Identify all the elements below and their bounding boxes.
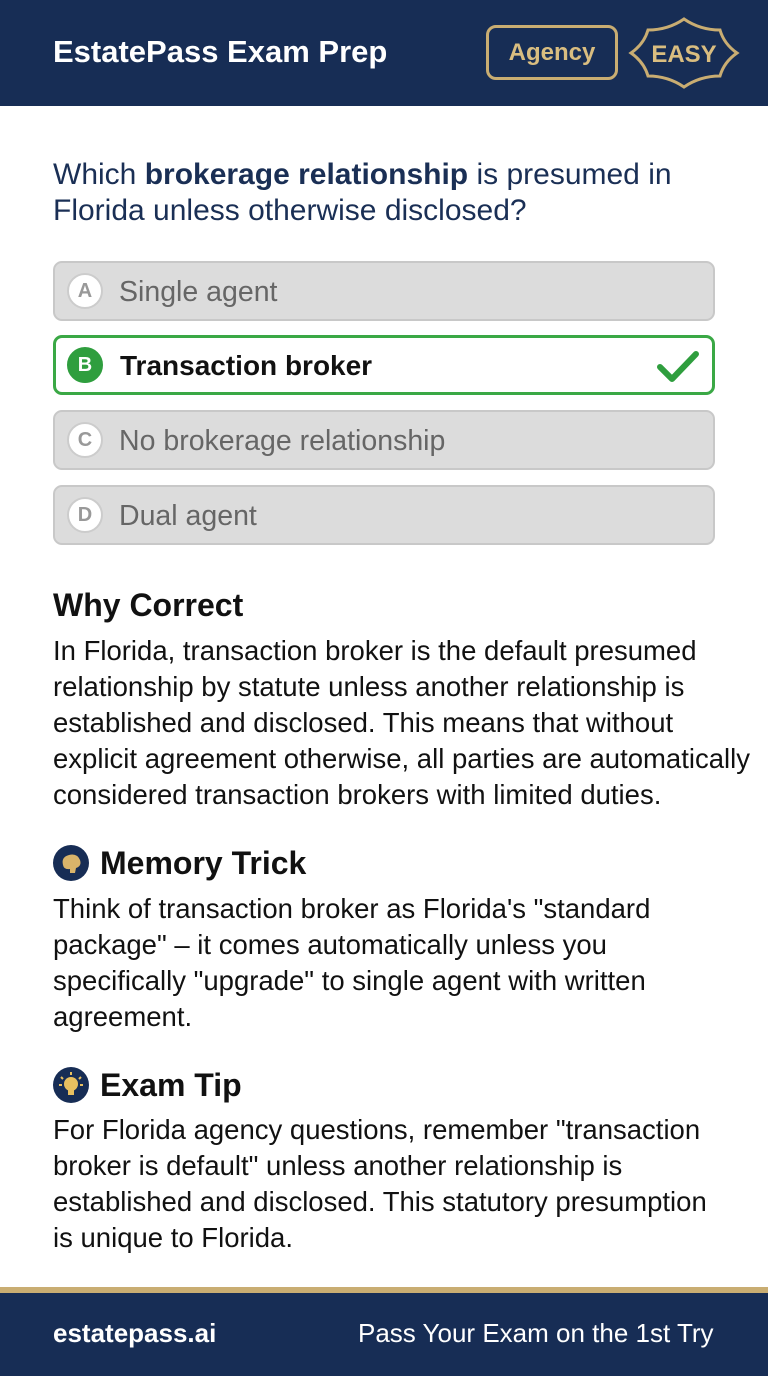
badge: easy: [628, 17, 740, 89]
footer: [0, 1287, 768, 1376]
icon: check: [657, 351, 699, 382]
option A: A: [78, 280, 92, 302]
footer: slogan: Pass Your Exam on the 1st Try: [358, 1318, 714, 1348]
text: exam tip: broker is default" unless another relationship is: [53, 1150, 622, 1181]
title: EstatePass Exam Prep: [53, 34, 387, 69]
text: exam tip: is unique to Florida.: [53, 1222, 293, 1253]
text: why correct: established and disclosed. This means that without: [53, 707, 673, 738]
option B correct: Transaction broker: [120, 350, 372, 381]
badge: agency: [486, 25, 618, 80]
icon: bulb: [53, 1067, 89, 1103]
text: memory trick: specifically "upgrade" to single agent with written: [53, 965, 646, 996]
question: [53, 158, 672, 227]
badge: easy: EASY: [651, 41, 717, 68]
text: why correct: relationship by statute unless another relationship is: [53, 671, 684, 702]
footer: site: estatepass.ai: [53, 1318, 216, 1348]
text: exam tip: [53, 1114, 707, 1253]
option C: C: [78, 429, 92, 451]
heading: why correct: Why Correct: [53, 587, 243, 623]
heading: exam tip: Exam Tip: [100, 1067, 242, 1103]
icon: brain: [53, 845, 89, 881]
text: exam tip: established and disclosed. This statutory presumption: [53, 1186, 707, 1217]
header: [0, 0, 768, 106]
text: memory trick: Think of transaction broker as Florida's "standard: [53, 893, 650, 924]
option A: [53, 261, 715, 321]
text: why correct: [53, 635, 750, 810]
option D: Dual agent: [119, 500, 257, 532]
option D: D: [78, 504, 92, 526]
question: Florida unless otherwise disclosed?: [53, 194, 527, 227]
text: memory trick: agreement.: [53, 1001, 192, 1032]
option B correct: [53, 335, 715, 395]
text: why correct: considered transaction brokers with limited duties.: [53, 779, 661, 810]
question: Which brokerage relationship is presumed in: [53, 158, 672, 191]
text: why correct: In Florida, transaction broker is the default presumed: [53, 635, 697, 666]
text: exam tip: For Florida agency questions, remember "transaction: [53, 1114, 700, 1145]
text: memory trick: package" – it comes automatically unless you: [53, 929, 607, 960]
text: why correct: explicit agreement otherwise, all parties are automatically: [53, 743, 750, 774]
text: memory trick: [53, 893, 650, 1032]
option C: No brokerage relationship: [119, 425, 445, 457]
option C: [53, 410, 715, 470]
option B correct: B: [78, 354, 92, 376]
option A: Single agent: [119, 276, 277, 308]
option D: [53, 485, 715, 545]
badge: agency: Agency: [509, 39, 595, 66]
heading: memory trick: Memory Trick: [100, 845, 306, 881]
